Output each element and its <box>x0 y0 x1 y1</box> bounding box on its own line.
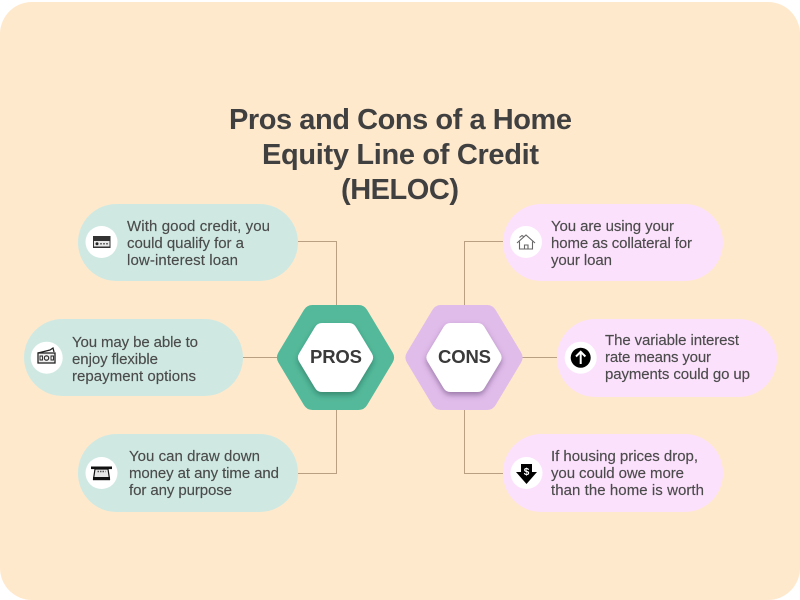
text: flexible repayment: enjoy flexible <box>72 351 158 368</box>
text: collateral: You are using your <box>551 218 674 235</box>
icon: house <box>510 226 542 258</box>
text: flexible repayment: You may be able to <box>72 334 198 351</box>
pros hexagon <box>287 315 384 400</box>
text: collateral: home as collateral for <box>551 235 692 252</box>
text: flexible repayment <box>72 334 198 385</box>
icon: credit card <box>86 226 118 258</box>
text: good credit: could qualify for a <box>127 235 245 252</box>
text: housing prices: than the home is worth <box>551 482 704 499</box>
panel: pro flexible repayment <box>24 319 243 396</box>
icon: up arrow <box>565 342 597 374</box>
text: variable rate: The variable interest <box>605 332 740 349</box>
text: draw down money: money at any time and <box>129 465 279 482</box>
panel: con variable rate <box>557 319 777 397</box>
text: variable rate: payments could go up <box>605 366 750 383</box>
text: good credit: With good credit, you <box>127 218 270 235</box>
text: housing prices <box>551 448 704 499</box>
icon: down arrow with dollar: $ <box>524 467 530 478</box>
pros hexagon: PROS <box>310 346 362 367</box>
text: draw down money <box>129 448 279 499</box>
text: good credit <box>127 218 270 269</box>
panel: pro good credit <box>78 204 298 281</box>
text: housing prices: you could owe more <box>551 465 684 482</box>
title: Pros and Cons of a Home <box>229 104 572 136</box>
title: Equity Line of Credit <box>262 139 539 171</box>
text: draw down money: for any purpose <box>129 482 232 499</box>
text: flexible repayment: repayment options <box>72 368 196 385</box>
text: draw down money: You can draw down <box>129 448 260 465</box>
connector lines <box>243 242 557 474</box>
icon: banknotes <box>31 342 63 374</box>
cons hexagon: CONS <box>438 346 491 367</box>
title: (HELOC) <box>341 174 459 206</box>
text: good credit: low-interest loan <box>127 252 238 269</box>
text: variable rate: rate means your <box>605 349 711 366</box>
title <box>229 104 572 206</box>
cons hexagon <box>416 315 512 400</box>
panel: pro draw down money <box>78 434 298 512</box>
panel: con housing prices <box>503 434 723 512</box>
icon: down arrow with dollar <box>510 457 542 489</box>
text: collateral <box>551 218 692 269</box>
text: collateral: your loan <box>551 252 612 269</box>
panel: con collateral <box>503 204 723 281</box>
icon: cash machine <box>86 457 118 489</box>
text: housing prices: If housing prices drop, <box>551 448 698 465</box>
text: variable rate <box>605 332 750 383</box>
